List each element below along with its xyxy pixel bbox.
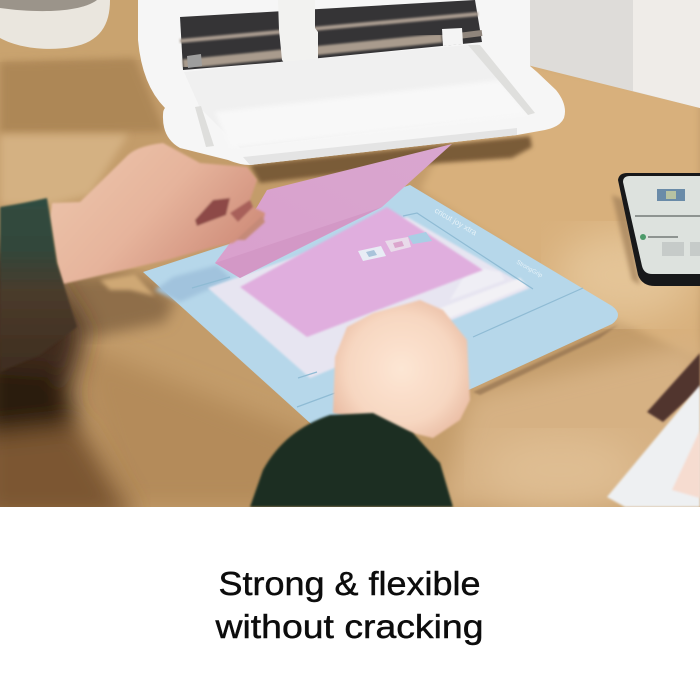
machine slot [180, 0, 482, 70]
fingers crease [195, 198, 230, 226]
pink cardstock on mat [240, 207, 483, 337]
left hand [50, 143, 265, 284]
pink paper sheet [672, 430, 700, 498]
hand shadow on mat [155, 265, 232, 302]
body and arm in shadow [0, 240, 135, 520]
mat label text: cricut joy xtra [433, 206, 479, 238]
machine rails [180, 14, 478, 41]
wooden table [0, 55, 700, 507]
right sleeve [250, 413, 453, 507]
cutting machine [138, 0, 565, 165]
wall top right [527, 0, 700, 108]
mat seam lines [192, 213, 583, 407]
small cut square shapes [358, 232, 432, 261]
caption line 2: without cracking [214, 608, 484, 645]
bowl top left [0, 0, 110, 49]
mat shadow [473, 325, 618, 395]
blue cutting mat: StrongGrip [515, 260, 544, 280]
right hand [333, 300, 470, 438]
photo: hands placing pink cardstock on a blue cutting mat [0, 0, 700, 520]
dark brown strip [647, 353, 700, 422]
phone [612, 173, 700, 286]
machine shadow [250, 136, 532, 183]
mat inner white sheet [208, 217, 530, 378]
caption line 1: Strong & flexible [218, 565, 480, 602]
machine tray [271, 62, 284, 63]
white paper sheet [607, 385, 700, 507]
caption [214, 565, 484, 645]
blue cutting mat [143, 185, 618, 445]
light and shadow on table [0, 58, 700, 507]
lifted pink flap [215, 144, 452, 278]
left sleeve [0, 198, 77, 372]
machine carriage [278, 9, 318, 62]
